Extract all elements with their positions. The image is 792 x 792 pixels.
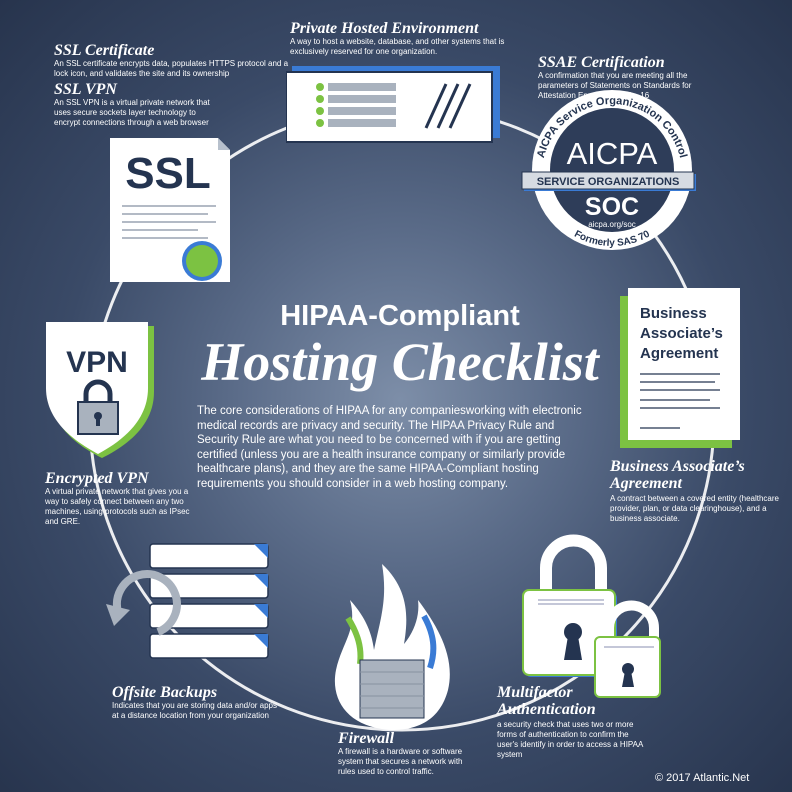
icon: server box xyxy=(286,66,500,143)
icon: business associate document: Business xyxy=(640,305,707,322)
icon: padlocks xyxy=(522,534,661,698)
text: intro paragraph: The core considerations of HIPAA for any companiesworking with electronic medical records are privacy and security. The HIPAA Privacy Rule and Security Rule are what you need to be concerned with if you are getting certified (unless you are a health insurance company or similarly provide healthcare plans), and they are the same HIPAA-Compliant hosting requirements you should consider in a web hosting company. xyxy=(197,405,582,490)
text: SSL certificate: An SSL certificate encrypts data, populates HTTPS protocol and a lock icon, and validates the site and its ownership xyxy=(54,59,288,78)
text: private hosted environment: Private Hosted Environment xyxy=(290,20,478,37)
text: SSAE certification xyxy=(538,54,692,100)
text: firewall xyxy=(338,730,462,776)
icon: business associate document xyxy=(620,288,740,448)
text: firewall: A firewall is a hardware or software system that secures a network with rules used to control traffic. xyxy=(338,747,462,776)
icon: business associate document: Agreement xyxy=(640,345,718,362)
text: multifactor authentication: a security check that uses two or more forms of authentication to confirm the user's identify in order to access a HIPAA system xyxy=(497,720,643,759)
icon: SSL certificate xyxy=(110,138,230,282)
text: business associate: Business Associate’s Agreement xyxy=(610,458,745,492)
icon: AICPA badge: aicpa.org/soc xyxy=(588,220,636,229)
icon: AICPA badge xyxy=(522,90,696,250)
icon: VPN shield: VPN xyxy=(66,346,128,379)
text: SSAE certification: A confirmation that you are meeting all the parameters of Statements on Standards for Attestation Engagement No. 16 xyxy=(538,71,691,100)
text: encrypted VPN: Encrypted VPN xyxy=(45,470,149,487)
text: private hosted environment xyxy=(290,20,504,56)
icon: AICPA badge: SOC xyxy=(585,193,639,221)
icon: SSL certificate: SSL xyxy=(125,149,211,198)
text: encrypted VPN: A virtual private network that gives you a way to safely connect between any two machines, using protocols such as IPsec and GRE. xyxy=(45,487,190,526)
icon: AICPA badge: AICPA xyxy=(567,136,658,171)
text: offsite backups xyxy=(112,684,277,720)
text: SSL certificate: SSL VPN xyxy=(54,81,117,98)
text: business associate xyxy=(609,458,779,523)
text: firewall: Firewall xyxy=(338,730,394,747)
title: Hosting Checklist xyxy=(201,332,599,392)
text: business associate: A contract between a covered entity (healthcare provider, plan, or data clearinghouse), and a business associate. xyxy=(610,494,779,523)
icon: VPN shield xyxy=(46,322,154,458)
text: multifactor authentication: Multifactor Authentication xyxy=(497,684,596,718)
text: offsite backups: Offsite Backups xyxy=(112,684,217,701)
icon: firewall flame xyxy=(334,564,450,730)
icon: AICPA badge: Formerly SAS 70 xyxy=(574,230,649,248)
text: SSL certificate xyxy=(54,42,288,127)
title: HIPAA-Compliant xyxy=(280,300,520,332)
copyright: © 2017 Atlantic.Net xyxy=(655,772,749,784)
icon: offsite backup servers xyxy=(106,543,269,659)
text: offsite backups: Indicates that you are storing data and/or apps at a distance location from your organization xyxy=(112,701,277,720)
icon: AICPA badge: SERVICE ORGANIZATIONS xyxy=(537,176,679,188)
text: encrypted VPN xyxy=(44,470,190,526)
icon: business associate document: Associate’s xyxy=(640,325,723,342)
text: private hosted environment: A way to host a website, database, and other systems that is exclusively reserved for one organization. xyxy=(290,37,504,56)
text: multifactor authentication xyxy=(496,684,644,759)
text: SSL certificate: SSL Certificate xyxy=(54,42,154,59)
icon: AICPA badge: AICPA Service Organization Control xyxy=(537,97,688,158)
text: SSAE certification: SSAE Certification xyxy=(538,54,665,71)
title xyxy=(200,300,600,392)
text: SSL certificate: An SSL VPN is a virtual private network that uses secure sockets layer technology to encrypt connections through a web browser xyxy=(54,98,210,127)
